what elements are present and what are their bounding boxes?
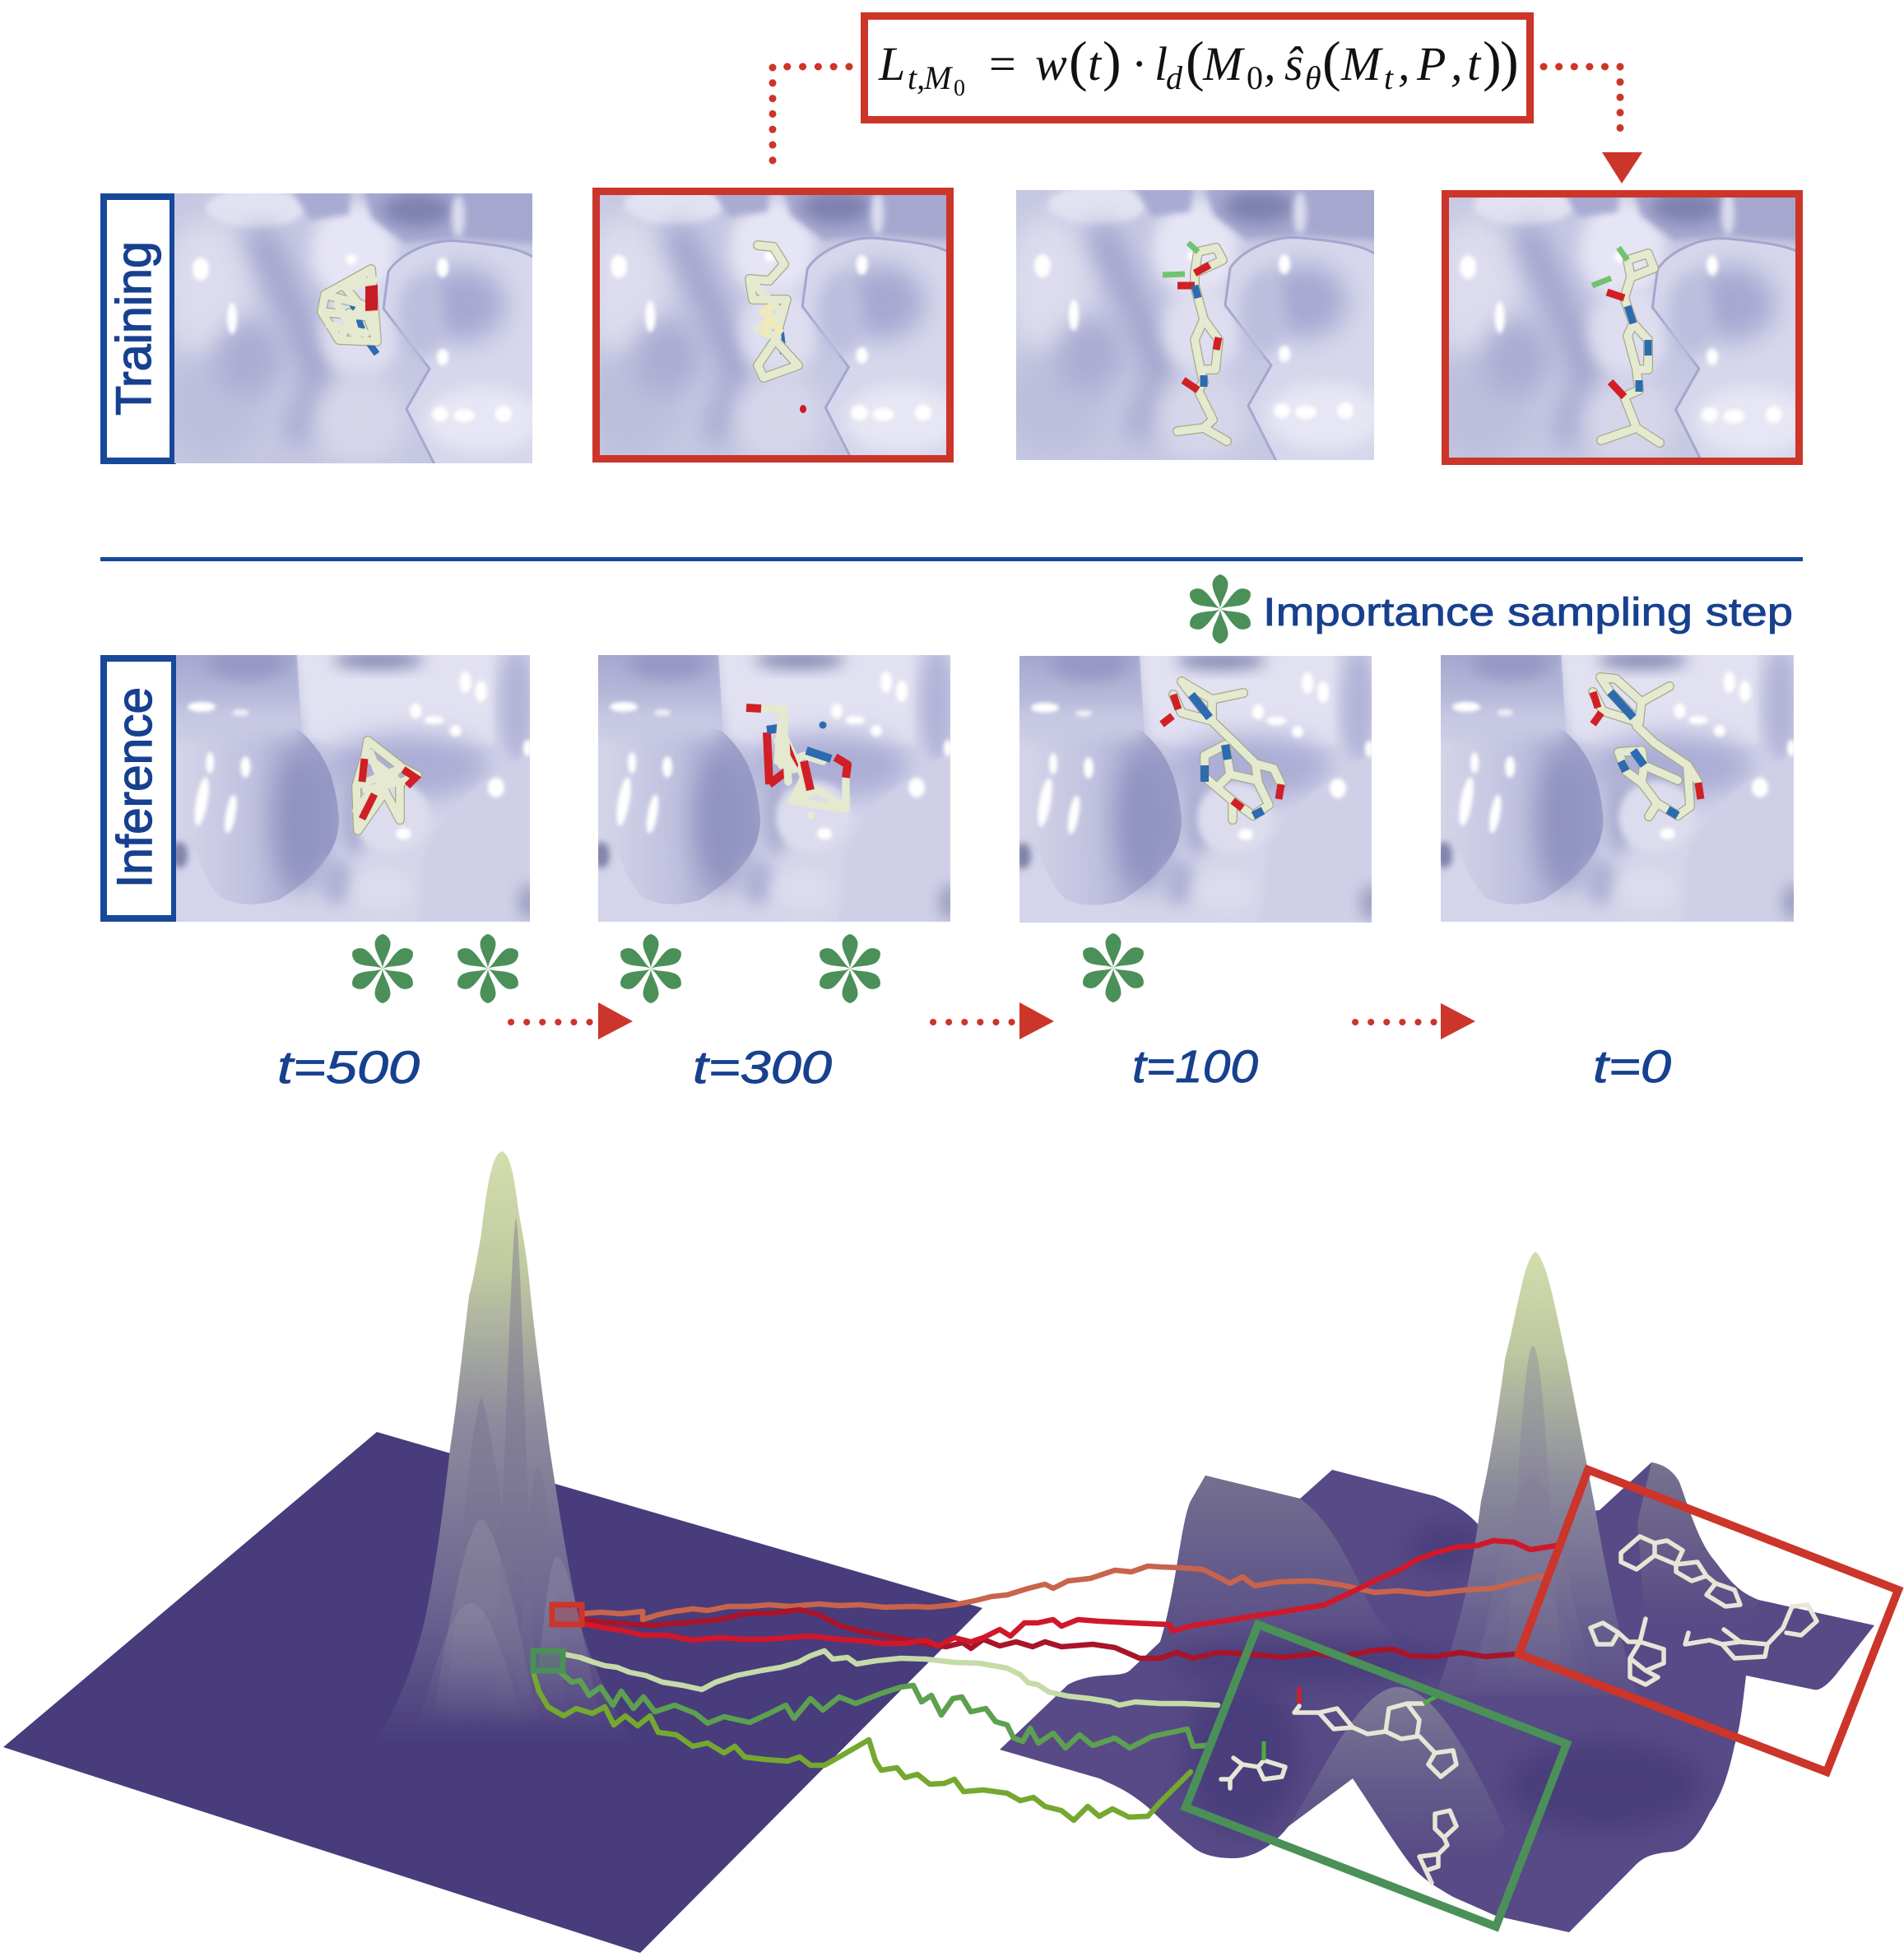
time label t=300: t=300 — [693, 1041, 832, 1093]
legend: importance sampling step: Importance sampling step — [1263, 591, 1793, 635]
equation box: loss function: ) — [1500, 30, 1519, 92]
equation box: loss function: ( — [1069, 30, 1088, 92]
equation box: loss function: w — [1035, 37, 1067, 91]
energy landscape right: rugged surface with peak — [1000, 1252, 1874, 1932]
equation box: loss function: l — [1154, 37, 1168, 91]
equation box: loss function: t, — [908, 59, 925, 96]
time label t=0: t=0 — [1593, 1040, 1671, 1092]
time arrow 2 — [933, 1002, 1054, 1039]
equation box: loss function: = — [989, 37, 1016, 91]
training panel 4: framed final ligand — [1429, 174, 1815, 469]
green selection frame — [1186, 1625, 1567, 1927]
equation box: loss function: 0 — [954, 76, 965, 101]
training panel 2: framed ligand, partly denoised — [580, 174, 964, 467]
start marker: green square — [533, 1651, 563, 1671]
equation box: loss function: · — [1131, 37, 1147, 91]
importance sampling marker 3 — [617, 934, 685, 1003]
time label t=100: t=100 — [1132, 1040, 1258, 1092]
sampling trajectories: green low-energy paths — [534, 1651, 1218, 1820]
equation box: loss function: θ — [1305, 59, 1321, 96]
equation box: loss function: , — [1398, 37, 1410, 91]
time arrow 1 — [511, 1002, 633, 1039]
sampling trajectories: red high-energy paths — [583, 1541, 1557, 1658]
label box: Training — [104, 197, 173, 461]
label box: Inference — [104, 658, 174, 918]
equation box: loss function: M — [923, 59, 954, 96]
equation box: loss function: d — [1166, 59, 1183, 96]
equation box: loss function: ŝ — [1284, 37, 1304, 91]
equation box: loss function: , — [1264, 37, 1275, 91]
training panel 1: tangled ligand — [162, 177, 545, 467]
equation box: loss function: ( — [1322, 30, 1341, 92]
start marker: red square — [552, 1605, 582, 1625]
dotted arrow with head: equation to fourth training panel — [1544, 67, 1642, 184]
dotted arrow: equation to second training panel — [773, 67, 849, 174]
time label t=500: t=500 — [277, 1041, 420, 1093]
inference panel t=100: ligand with errors — [1011, 648, 1383, 923]
equation box: loss function: P — [1416, 37, 1446, 91]
time arrow 3 — [1355, 1003, 1475, 1039]
equation box: loss function: L — [878, 37, 905, 91]
training panel 3: ligand nearly formed — [1004, 174, 1386, 464]
equation box: loss function: t — [1088, 37, 1103, 91]
equation box: loss function: ) — [1483, 30, 1502, 92]
equation box: loss function — [864, 16, 1530, 120]
importance sampling marker 1 — [349, 934, 416, 1003]
equation box: loss function: t — [1467, 37, 1482, 91]
equation box: loss function: t — [1384, 59, 1394, 96]
legend: importance sampling step — [1187, 574, 1793, 644]
importance sampling marker 2 — [454, 934, 522, 1003]
equation box: loss function: M — [1202, 37, 1245, 91]
molecules in low-energy region — [1221, 1687, 1456, 1883]
label box: Training: Training — [106, 241, 161, 416]
equation box: loss function: , — [1451, 37, 1463, 91]
divider line — [100, 557, 1803, 561]
inference panel t=0: final ligand — [1433, 647, 1805, 922]
inference panel t=500: tangled ligand — [168, 647, 541, 922]
equation box: loss function: ( — [1186, 30, 1205, 92]
molecules in high-energy region — [1591, 1536, 1817, 1685]
energy landscape left: flat plane with single peak — [3, 1151, 982, 1953]
label box: Inference: Inference — [107, 687, 162, 888]
importance sampling marker 5 — [1080, 933, 1147, 1002]
red selection frame — [1519, 1470, 1898, 1772]
importance sampling marker 4 — [816, 934, 884, 1003]
inference panel t=300: partly assembled ligand — [590, 647, 962, 922]
equation box: loss function: M — [1340, 37, 1383, 91]
equation box: loss function: ) — [1103, 30, 1122, 92]
equation box: loss function: 0 — [1247, 59, 1263, 96]
